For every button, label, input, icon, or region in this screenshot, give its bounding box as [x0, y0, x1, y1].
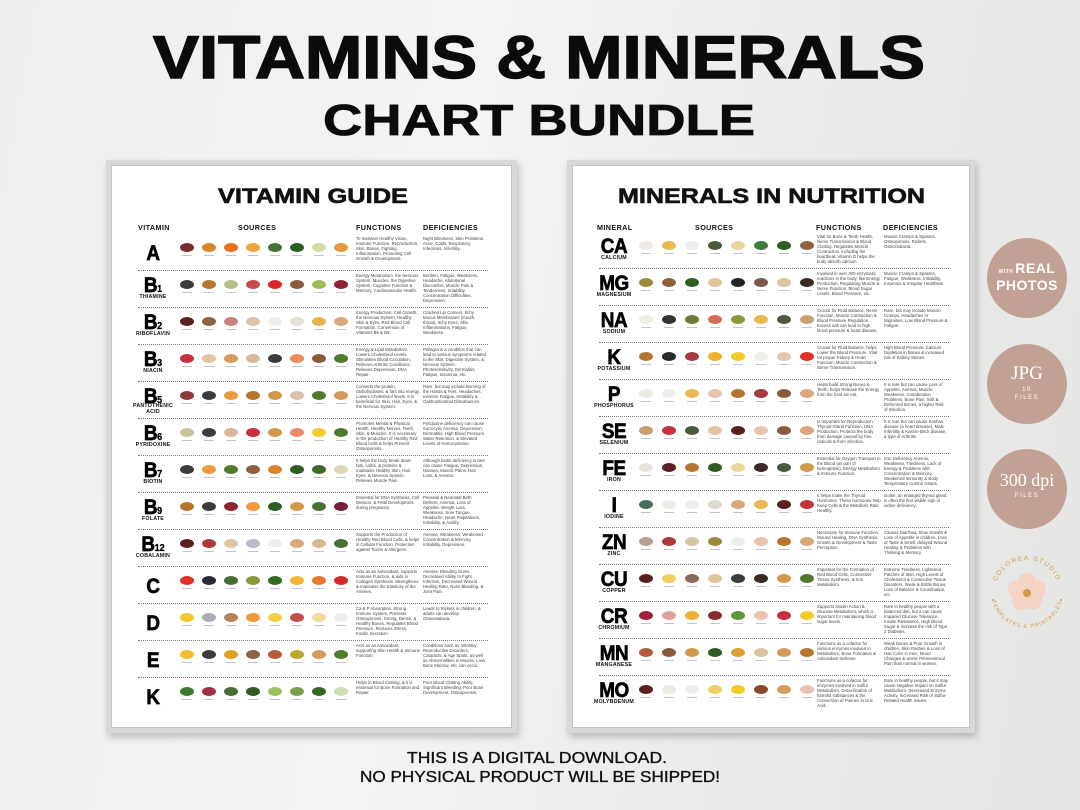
row: B2 [136, 307, 488, 337]
row: B1: THIAMINE [139, 294, 167, 300]
row: CR: Supports Insulin Action & Glucose Metabolism, which is important for maintaining blood sugar levels. [817, 604, 876, 624]
row: B9: B9 [144, 496, 162, 519]
row: B9: Prenatal & Neonatal Birth Defects, Anemia, Loss of Appetite, Weight Loss, Weakness, Sore Tongue, Headache, Heart Palpitations, Irritability, & Acidity. [423, 495, 480, 525]
row: B2: Cracked Lip Corners, Itchy Mucus Membranes (mouth, throat), Itchy Eyes, Skin Inflammations, Fatigue, Weakness. [423, 310, 475, 335]
row: B1: Energy Metabolism, the Nervous System, Muscles, the Digestive System, Cognitive Function & Memory, Cardiovascular Health. [356, 273, 418, 293]
row: I: I [612, 494, 616, 517]
row: FE: Essential for Oxygen Transport in the Blood (as part of hemoglobin), Energy Metabolism & Immune Function. [817, 456, 881, 476]
row: B5: Rare, but may include Burning of the Hands & Feet, Headaches, extreme Fatigue, Irritability & Gastrointestinal Disturbances. [423, 384, 486, 404]
row: FE: IRON [607, 477, 621, 483]
row: A [146, 236, 484, 265]
row: MG: Muscle Cramps & Spasms, Fatigue, Weakness, Irritability, Insomnia & Irregular Heartbeat. [884, 271, 944, 286]
row: C [138, 566, 488, 598]
row: B7: BIOTIN [143, 479, 163, 485]
row: SE: Is Important for Reproduction, Thyroid Gland Function, DNA Production. Protects the body from damage caused by free radicals & from infection. [817, 419, 874, 444]
row: SE [599, 416, 949, 446]
column headers: DEFICIENCIES [423, 223, 478, 232]
poster title: vitamin guide: VITAMIN GUIDE [218, 185, 408, 208]
column headers: FUNCTIONS [356, 223, 402, 232]
row: B2: B2 [144, 311, 162, 334]
row: MO: MOLYBDENUM [594, 699, 634, 705]
row: MN [596, 638, 949, 668]
row: CU [599, 564, 949, 597]
row: E: Conditions such as Infertility, Reproductive Disorders, Cataracts, & Age Spots, as well as Abnormalities in Muscle, Liver, Bone Marrow, etc. can occur. [423, 643, 487, 668]
row: CA [601, 234, 936, 264]
row: B3: Energy & Lipid Metabolism, Lowers Cholesterol Levels, Stimulates Blood Circulation, Relieves Arthritic Conditions, Relieves Depression, DNA Repair. [356, 347, 411, 377]
row: MG: MG [599, 272, 629, 295]
row: P [594, 379, 949, 412]
row: B5: Converts the protein, carbohydrates, & fats into energy. Lowers Cholesterol levels. It is beneficial for Skin, Hair, Eyes, & the Nervous System. [356, 384, 420, 409]
badge: 300 dpi files: FILES [1015, 493, 1039, 499]
title: CHART BUNDLE [323, 96, 755, 145]
row: D: Leads to Rickets in children, & adults can develop Osteomalacia. [423, 606, 481, 621]
row: B6: Promotes Mental & Physical Health, Healthy Nerves, Teeth, Skin, & Muscles. It is necessary in the production of Healthy Red Blood Cells & helps Prevent Osteoporosis. [356, 421, 417, 451]
row: E: E [147, 649, 159, 672]
row: CU: Extreme Tiredness, Lightened Patches of Skin, High Levels of Cholesterol & Connective Tissue Disorders, Weak & Brittle Bones, Loss of Balance & Coordination, etc. [884, 567, 946, 597]
row: B2: Energy Production, Cell Growth, the Nervous System, Healthy Skin & Eyes, Red Blood Cell Formation, Conversion of Vitamins B6 & B9. [356, 310, 417, 335]
row: B12: COBALAMIN [136, 553, 170, 559]
footer notice [360, 750, 720, 786]
row: A: Night Blindness, Skin Problems, Acne, Colds, Respiratory Infections, Infertility. [423, 236, 484, 251]
logo: colorea studio [992, 556, 1062, 628]
row: K: Poor Blood Clotting Ability, Significant Bleeding, Poor Bone Development, Osteoporosis. [423, 680, 483, 695]
row: ZN: Causes Diarrhea, Slow Growth & Loss of Appetite in children, Loss of Taste & Smell, delayed Wound Healing & Problems with Thinking & Memory. [884, 530, 947, 555]
row: I: Goiter, an enlarged thyroid gland, is often the first visible sign of iodine deficiency. [884, 493, 948, 508]
row: NA [599, 305, 949, 335]
row: B1: B1 [144, 274, 162, 297]
row: B3: Pellagra is a condition that can lead to various symptoms related to the Skin, Digestive System, & Nervous System. Photosensitivity, Dermatitis, Fatigue, Insomnia, etc. [423, 347, 486, 377]
row: MO [594, 675, 949, 708]
row: P: P [608, 383, 620, 406]
row: B5: PANTOTHENIC [133, 403, 173, 409]
row: B6 [136, 418, 488, 451]
row: CU: Important for the Formation of Red Blood Cells, Connective Tissue Synthesis, & Iron Metabolism. [817, 567, 874, 587]
column headers [138, 223, 478, 232]
row: B12: B12 [141, 533, 165, 556]
row: D: Ca & P Absorption, Strong Immune System, Prevents Osteoporosis, Strong, Dense, & Healthy Bones, Regulates Blood Pressure, Reduces Stress, Insulin Secretion. [356, 606, 418, 636]
row: I: It helps make the Thyroid Hormones. These hormones help Keep Cells & the Metabolic Rate Healthy. [817, 493, 881, 513]
row: SE: SE [602, 420, 626, 443]
row: CA: CALCIUM [601, 255, 627, 261]
row: B12: Anemia, Weakness, Weakened Concentration & Memory, Irritability, Depression. [423, 532, 483, 547]
row: CA: Vital for Bone & Teeth Health, Nerve Transmission & Blood Clotting. Regulates Muscle Contraction, including the heartbeat. Vitamin D helps the body absorb calcium. [817, 234, 875, 264]
badge: with real photos: PHOTOS [996, 277, 1058, 293]
column headers: DEFICIENCIES [883, 223, 938, 232]
column headers: FUNCTIONS [816, 223, 862, 232]
row: SE: It is rare but can cause Keshan disease (a heart disease), Male Infertility & Kashin-Beck disease, a type of Arthritis. [884, 419, 947, 439]
row: MO: Rare in healthy people, but it may cause Negative Impact on Sulfur Metabolism, Decreased Enzyme Activity, Increased Risk of Sulfur-Related Health Issues. [884, 678, 948, 703]
row: NA: NA [601, 309, 627, 332]
row: B7: Although biotin deficiency is rare can cause Fatigue, Depression, Nausea, Muscle Pains, Hair Loss, & Anemia. [423, 458, 485, 478]
column headers: MINERAL [597, 223, 633, 232]
row: E [138, 640, 488, 672]
badge: with real photos [987, 238, 1067, 318]
row: CR [598, 601, 949, 634]
logo: colorea studio: TEMPLATES & PRINTABLES [992, 600, 1062, 628]
poster title: minerals in nutrition: MINERALS IN NUTRITION [618, 185, 925, 208]
row: MO: MO [599, 679, 629, 702]
row: K: K [146, 686, 160, 709]
title: VITAMINS & MINERALS [153, 24, 925, 91]
badge: with real photos: WITH REAL [999, 260, 1055, 276]
row: MG: MAGNESIUM [597, 292, 631, 298]
footer notice: THIS IS A DIGITAL DOWNLOAD. [407, 750, 667, 767]
row: K: POTASSIUM [598, 366, 630, 372]
row: B5: B5 [144, 385, 162, 408]
row: B2: RIBOFLAVIN [136, 331, 170, 337]
row: B6: PYRIDOXINE [136, 442, 170, 448]
row: P: It is rare but can cause Loss of Appetite, Anemia, Muscle Weakness, Coordination Problems, Bone Pain, Soft & Deformed Bones, a higher Risk of Infection. [884, 382, 944, 412]
row: C: Anemia, Bleeding Gums, Decreased Ability to Fight Infection, Decreased Wound Healing Rate, Nose Bleeding, & Joint Pain. [423, 569, 483, 594]
row: ZN [599, 527, 949, 557]
row: B5: ACID [146, 409, 160, 415]
row: B6: B6 [144, 422, 162, 445]
row: C: C [146, 575, 160, 598]
row: MO: Functions as a cofactor for enzymes involved in Sulfur Metabolism, Detoxification of harmful substances & the Conversion of Purines to Uric Acid. [817, 678, 873, 708]
row: B3 [138, 344, 488, 377]
footer notice: NO PHYSICAL PRODUCT WILL BE SHIPPED! [360, 769, 720, 786]
row: A: A [146, 242, 160, 265]
row: NA: Crucial for Fluid Balance, Nerve Function, Muscle Contraction & Blood Pressure Regulation. Excess salt can lead to high blood pressure & heart disease. [817, 308, 878, 333]
row: B7: It helps the body break down fats, carbs, & proteins & maintains Healthy Skin, Hair, Eyes, & Nervous System. Relieves Muscle Pain. [356, 458, 411, 483]
row: B5 [133, 381, 488, 415]
row: K: Crucial for Fluid Balance, helps Lower the Blood Pressure. Vital for proper Kidney & Heart Function, Muscle Contraction & Nerve Transmission. [817, 345, 877, 370]
title [152, 24, 925, 145]
column headers: VITAMIN [138, 223, 170, 232]
row: CU: CU [601, 568, 627, 591]
row: CA: Muscle Cramps & Spasms, Osteoporosis, Rickets, Osteomalacia. [884, 234, 936, 249]
row: ZN: Necessary for Immune Function, Wound Healing, DNA Synthesis, Growth & Development & Taste Perception. [817, 530, 879, 550]
row: P: PHOSPHORUS [594, 403, 634, 409]
row: MN: MANGANESE [596, 662, 632, 668]
row: D: D [146, 612, 160, 635]
column headers [597, 223, 938, 232]
column headers: SOURCES [238, 223, 276, 232]
badge: 300 dpi files [987, 449, 1067, 529]
row: B7 [138, 455, 488, 485]
row: CR: CHROMIUM [598, 625, 630, 631]
row: MG: Involved in over 300 enzymatic reactions in the body, like Energy Production, Regulating Muscle & Nerve Function, Blood Sugar Levels, Blood Pressure, etc. [817, 271, 880, 296]
row: MG [596, 268, 949, 298]
row: K [598, 342, 949, 372]
row: ZN: ZN [602, 531, 626, 554]
row: CA: CA [601, 235, 627, 258]
row: B1 [138, 270, 488, 303]
row: MN: Weak Bones & Poor Growth in children, Skin Rashes & Loss of Hair Color in men, Mood Changes & worse Premenstrual Pain than normal in women. [884, 641, 945, 666]
row: B6: Pyridoxine deficiency can cause microcytic Anemia, Depression, Dermatitis, High Blood Pressure, Water Retention, & Elevated Levels of Homocysteine. [423, 421, 485, 446]
row: FE [599, 453, 949, 486]
badge: jpg 10 files [987, 344, 1067, 424]
row: B12 [136, 529, 488, 559]
row: I [599, 490, 949, 520]
row: K: Helps in Blood Clotting, & it is essential for Bone Formation and Repair. [356, 680, 419, 695]
logo: colorea studio: COLOREA STUDIO [993, 556, 1060, 580]
panel: minerals in nutrition poster [567, 160, 975, 733]
row: D [138, 603, 488, 636]
row: SE: SELENIUM [600, 440, 628, 446]
row: B7: B7 [144, 459, 162, 482]
row: MN: MN [600, 642, 628, 665]
row: B9 [138, 492, 488, 525]
row: K: K [607, 346, 621, 369]
row: B12: Supports the Production of Healthy Red Blood Cells, & helps in Cellular Function. Protection against Toxins & Allergens. [356, 532, 419, 552]
row: CU: COPPER [602, 588, 626, 594]
row: FE: Iron Deficiency Anemia, Weakness, Tiredness, Lack of Energy & Problems with Concentration & Memory, Weakened Immunity & Body Temperature Control Issues. [884, 456, 941, 486]
row: MN: Functions as a cofactor for various enzymes involved in Metabolism, Bone Formation & Antioxidant Defense. [817, 641, 876, 661]
badge: 300 dpi files: 300 dpi [1000, 470, 1054, 490]
row: NA: Rare, but may include Muscle Cramps, Headaches or Migraines, Low Blood Pressure & Fatigue. [884, 308, 948, 328]
row: B9: Essential for DNA Synthesis, Cell Division, & Fetal Development during pregnancy. [356, 495, 419, 510]
row: K: High Blood Pressure, Calcium Depletion in Bones & increased risk of Kidney Stones. [884, 345, 944, 360]
column headers: SOURCES [695, 223, 733, 232]
row: B3: NIACIN [143, 368, 163, 374]
row: ZN: ZINC [607, 551, 621, 557]
row: CR: Rare in healthy people with a balanced diet, but it can cause Impaired Glucose Tolerance, Insulin Resistance, High Blood Sugar & increase the risk of Type 2 Diabetes. [884, 604, 947, 634]
badge: jpg 10 files: JPG [1011, 363, 1043, 384]
row: K [138, 677, 488, 709]
badge: jpg 10 files: 10 [1022, 387, 1032, 393]
row: I: IODINE [604, 514, 624, 520]
panel: vitamin guide poster [106, 160, 517, 733]
row: B1: Beriberi, Fatigue, Weakness, Headache, Abdominal Discomfort, Muscle Pain & Tenderness, Irritability, Concentration Difficulties, Depression. [423, 273, 478, 303]
badge: jpg 10 files: FILES [1015, 395, 1039, 401]
row: C: Acts as an Antioxidant, supports Immune Function, & aids in Collagen Synthesis. Strengthens & maintains the Elasticity of the Arteries. [356, 569, 418, 594]
row: B9: FOLATE [142, 516, 164, 522]
row: NA: SODIUM [603, 329, 625, 335]
row: FE: FE [602, 457, 626, 480]
row: B3: B3 [144, 348, 162, 371]
row: A: To maintain Healthy Vision, Immune Function, Reproduction, Skin, Bones, Fighting Inflammation, Promoting Cell Growth & Development. [356, 236, 418, 261]
row: CR: CR [601, 605, 627, 628]
row: P: Helps build Strong Bones & Teeth, helps Release the Energy from the food we eat. [817, 382, 879, 397]
row: E: Acts as an Antioxidant, supporting Skin Health & Immune Function. [356, 643, 420, 658]
